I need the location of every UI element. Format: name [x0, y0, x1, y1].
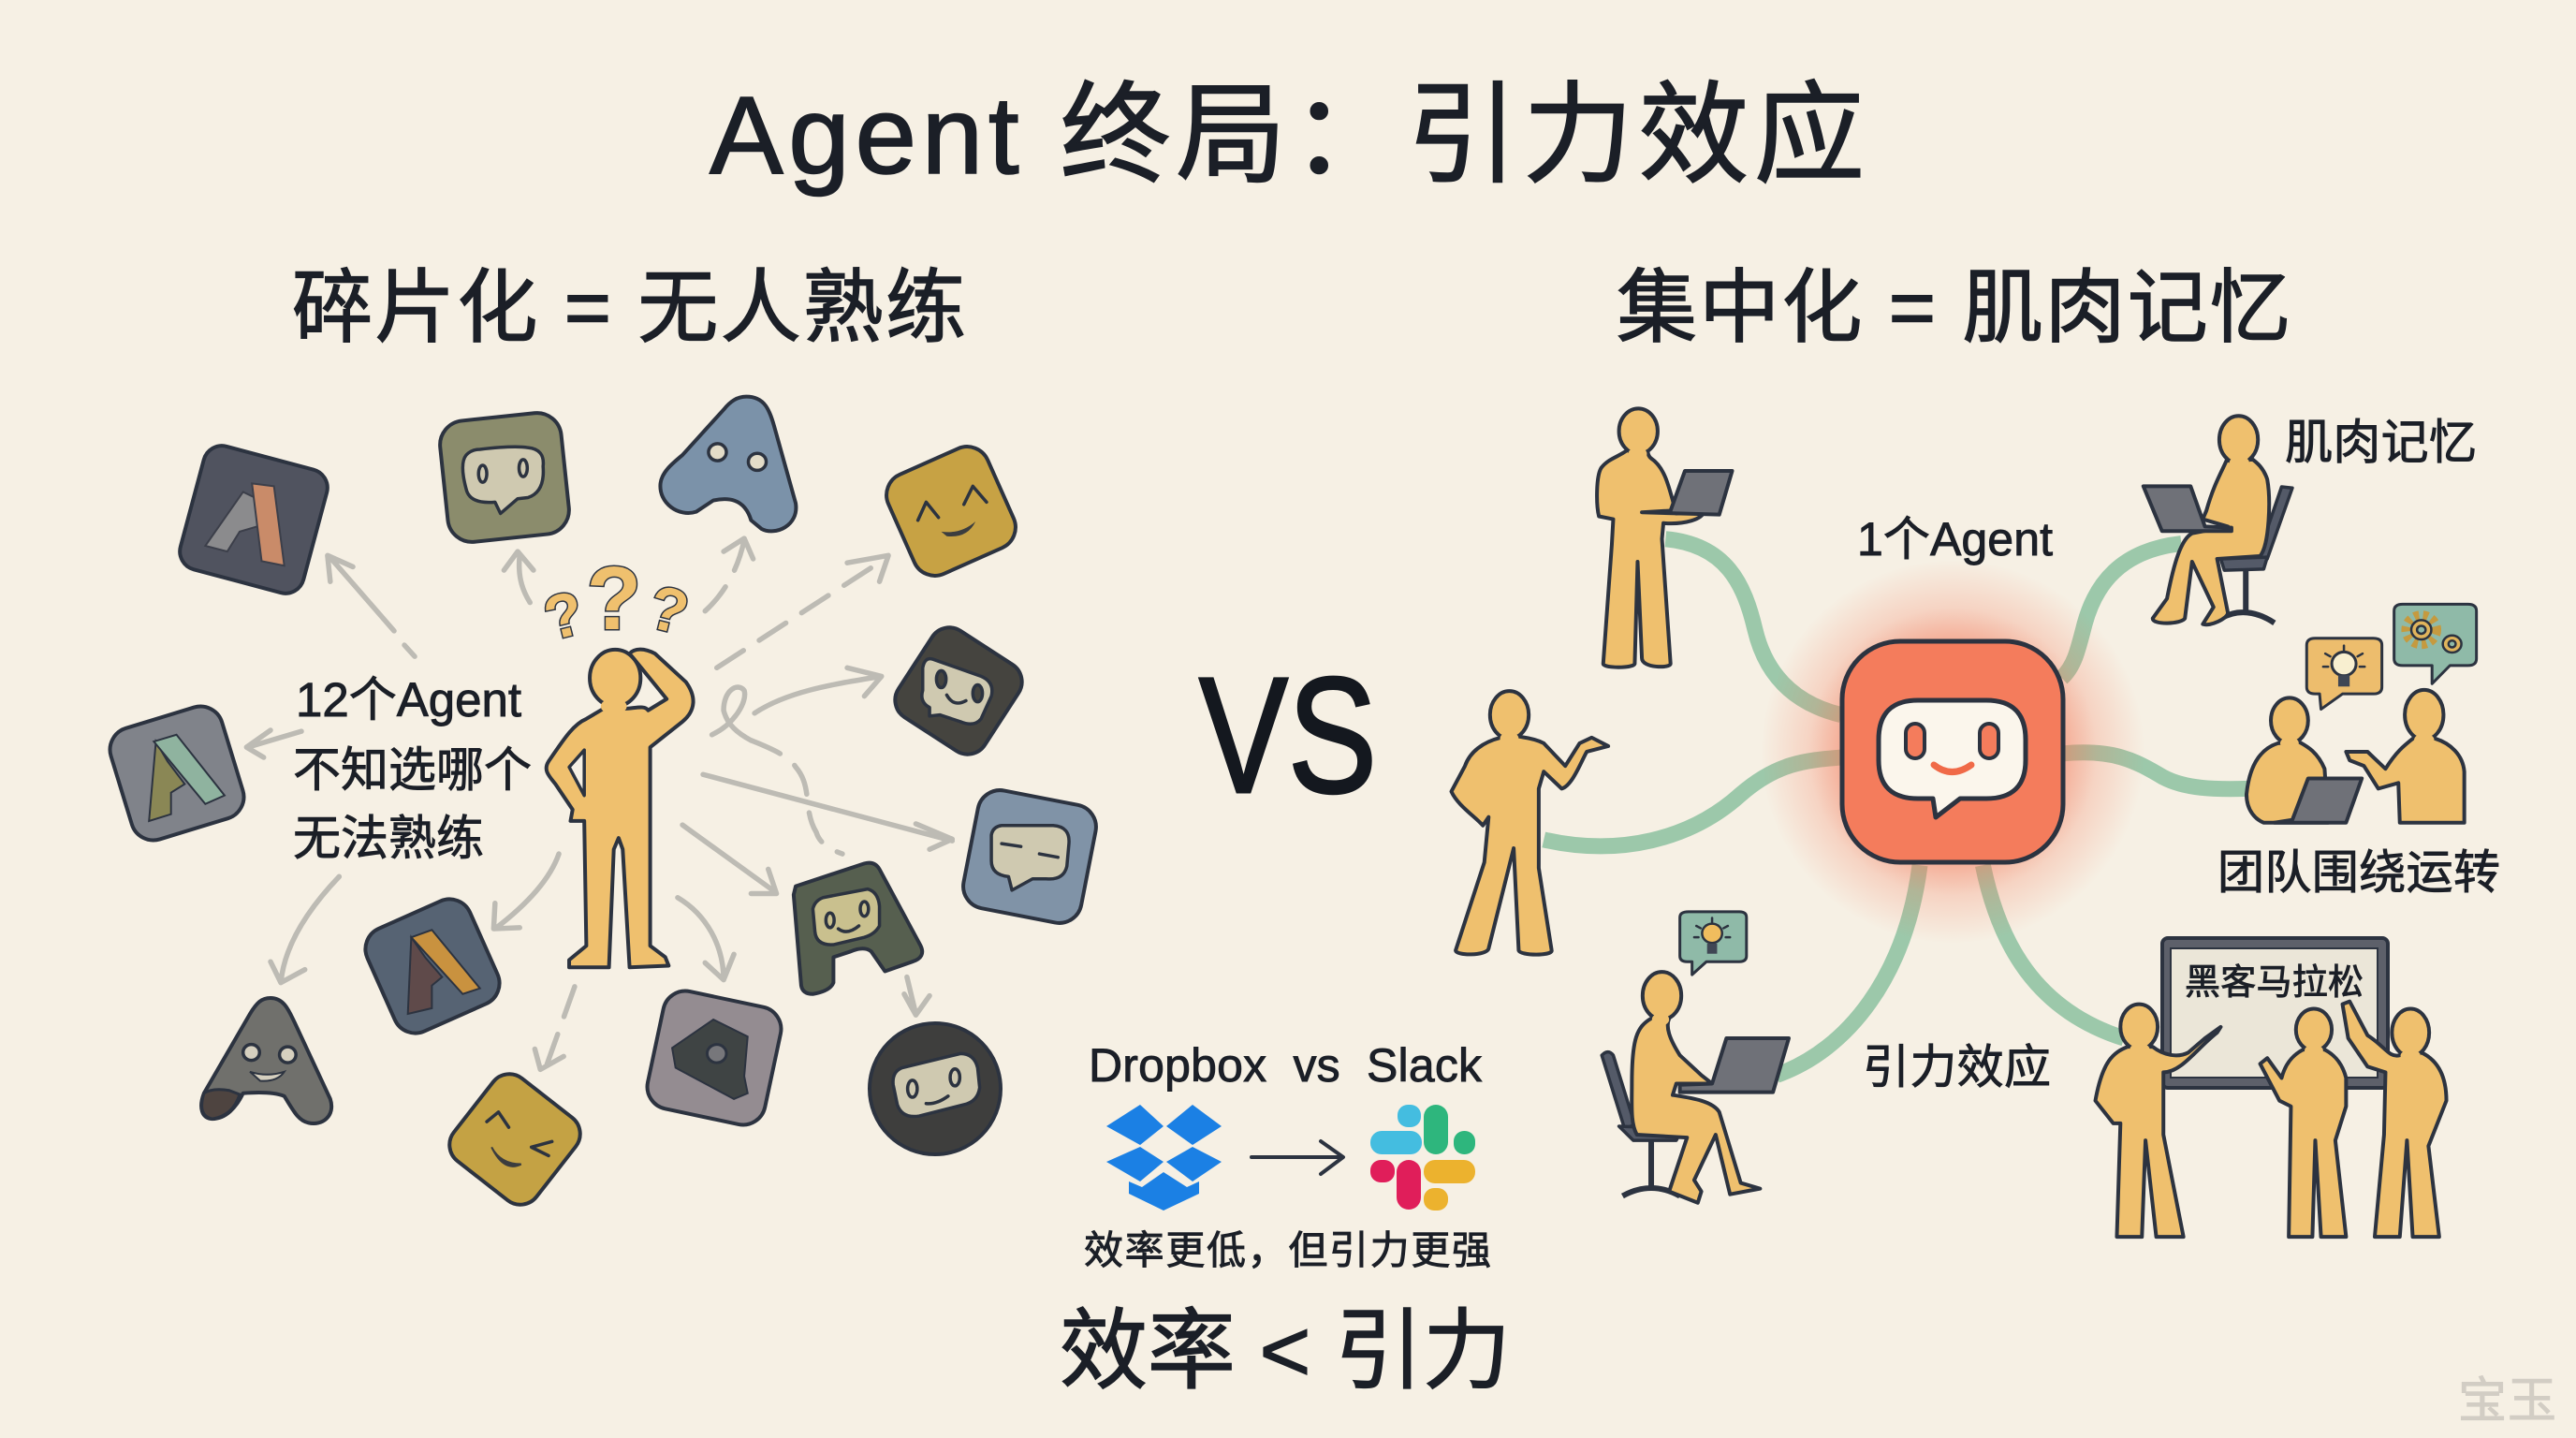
people: team discussion — [2247, 690, 2465, 823]
icon: gold smiling agent — [879, 439, 1023, 583]
caption: lower efficiency stronger gravity: 效率更低，但引力更强 — [1084, 1228, 1491, 1272]
text block: 12 agents: 12个Agent — [296, 673, 521, 726]
icon: idea speech bubble — [2306, 638, 2382, 710]
icon: gray letter A agent — [201, 998, 331, 1123]
person: seated laptop with idea — [1602, 912, 1789, 1203]
person: standing gesturing — [1452, 691, 1608, 955]
label: muscle memory: 肌肉记忆 — [2285, 416, 2477, 469]
icon: blue letter A agent — [660, 397, 796, 531]
hackathon whiteboard: 黑客马拉松 — [2185, 963, 2364, 1003]
icon: Dropbox logo — [1106, 1105, 1222, 1211]
conclusion: efficiency less than gravity: 效率 < 引力 — [1060, 1301, 1511, 1400]
watermark: 宝玉 — [2458, 1374, 2556, 1429]
icon: purple-gray agent — [643, 987, 785, 1129]
people: three at whiteboard — [2096, 1002, 2447, 1237]
central glow — [1761, 560, 2144, 944]
hackathon whiteboard — [2162, 938, 2388, 1088]
confused person — [547, 650, 694, 967]
heading: left fragmentation: 碎片化 = 无人熟练 — [292, 263, 966, 353]
icon: gold winking agent — [441, 1065, 589, 1213]
text block: 12 agents — [293, 673, 532, 865]
panel: fragmentation arrows — [246, 538, 952, 1069]
question marks — [537, 549, 695, 653]
text block: 12 agents: 不知选哪个 — [293, 743, 532, 797]
icon: central agent — [1842, 641, 2063, 862]
icon: Slack logo — [1370, 1105, 1475, 1211]
person: seated with laptop — [2144, 416, 2292, 624]
icon: slate A agent — [359, 892, 506, 1040]
label: team revolves: 团队围绕运转 — [2217, 846, 2500, 899]
heading: right centralization: 集中化 = 肌肉记忆 — [1617, 263, 2291, 353]
arrow: Dropbox to Slack — [1251, 1141, 1343, 1174]
icon: gray square A agent — [105, 701, 249, 845]
icon: dark olive A agent — [794, 863, 922, 994]
icon: dark square A agent — [176, 442, 331, 597]
VS label: VS — [1199, 644, 1377, 828]
text block: 12 agents: 无法熟练 — [293, 812, 484, 865]
question marks: ? — [537, 577, 591, 653]
question marks: ? — [587, 549, 641, 649]
icon: dark round agent — [870, 1023, 1001, 1154]
icon: blue-gray bubble agent — [959, 786, 1100, 927]
panel: gravity hub connections — [1544, 539, 2248, 1075]
label: 1 agent: 1个Agent — [1857, 513, 2053, 565]
question marks: ? — [642, 571, 695, 648]
icon: dark bubble agent — [887, 620, 1030, 762]
label: Dropbox vs Slack: Dropbox vs Slack — [1089, 1039, 1483, 1092]
person: standing with laptop — [1597, 408, 1733, 668]
title: Agent 终局：引力效应 — [710, 74, 1865, 198]
label: gravity effect: 引力效应 — [1863, 1041, 2051, 1093]
icon: gears speech bubble — [2394, 604, 2477, 683]
icon: olive bubble agent — [438, 411, 571, 544]
